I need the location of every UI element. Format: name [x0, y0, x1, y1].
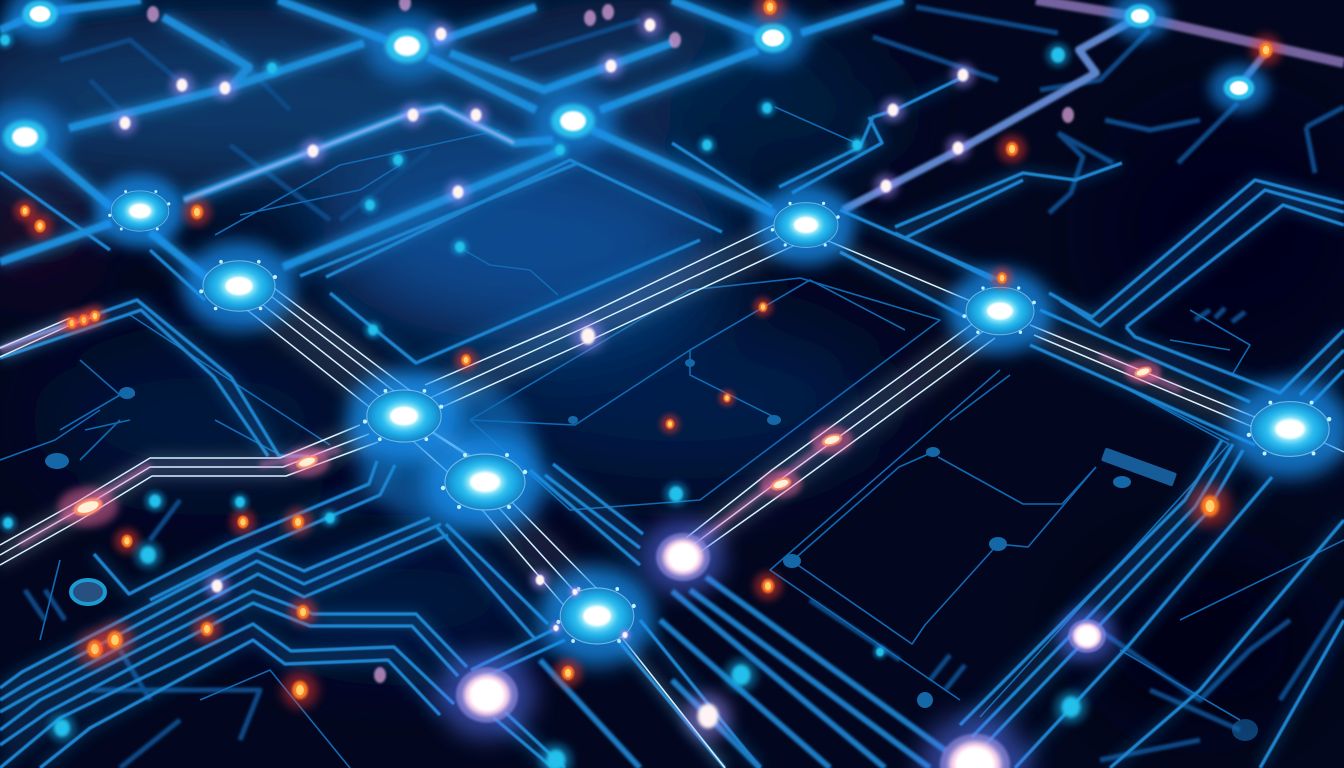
bright trunk lines: [0, 222, 1344, 768]
pink signal trails: [0, 318, 1180, 545]
wide bottom traces: [540, 577, 946, 768]
faint pink dots: [147, 0, 1074, 683]
bright trunk glow: [0, 222, 1344, 768]
chip pad: [1101, 447, 1177, 487]
violet trunks: [184, 0, 1344, 210]
cyan dots: [0, 31, 1088, 768]
ring component: [71, 580, 105, 604]
thick out-of-focus trunks: [0, 0, 903, 282]
trace pads: [45, 359, 1258, 741]
pink-orange signal pills: [58, 360, 1161, 527]
central hub glow: [355, 375, 535, 525]
white signal dots: [113, 13, 975, 739]
thick trunk glow: [0, 0, 903, 282]
